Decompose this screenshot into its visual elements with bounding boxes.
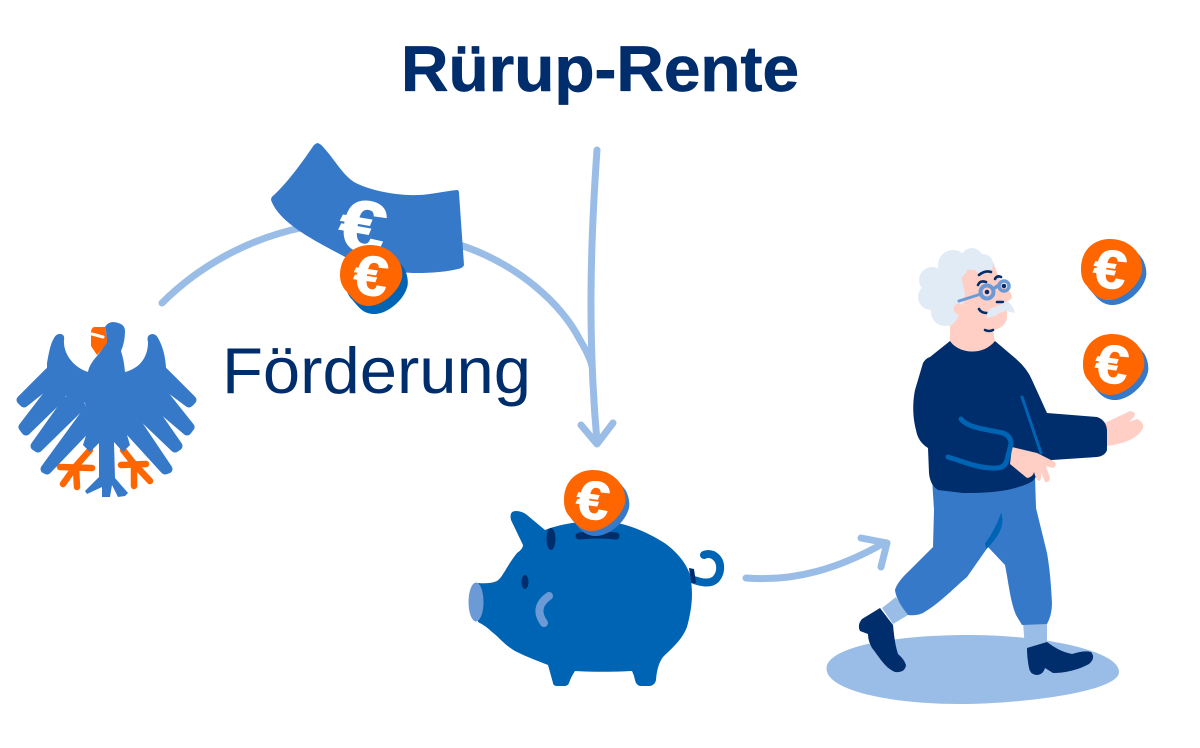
pensioner facial features bbox=[978, 271, 1005, 331]
label: Förderung: Förderung bbox=[222, 334, 531, 407]
pensioner glasses bbox=[959, 281, 1009, 301]
pig eye bbox=[522, 575, 528, 589]
pensioner shoes bbox=[859, 608, 1093, 675]
icon: upper juggled euro coin: € bbox=[1089, 238, 1130, 302]
pensioner right hand bbox=[1105, 411, 1143, 446]
arrow: piggy bank to pensioner bbox=[746, 538, 887, 579]
eagle feathers bbox=[21, 372, 192, 470]
icon: upper juggled euro coin bbox=[1081, 238, 1146, 305]
eagle beak bbox=[91, 327, 108, 355]
ground shadow bbox=[827, 635, 1119, 704]
illustration: walking pensioner bbox=[859, 248, 1143, 675]
eagle body bbox=[47, 322, 166, 497]
icon: federal eagle bbox=[21, 322, 192, 497]
pig body bbox=[478, 511, 692, 686]
icon: euro coin above piggy bank bbox=[564, 469, 629, 536]
pensioner neck and face bbox=[950, 262, 1012, 352]
pensioner moustache bbox=[987, 301, 1015, 318]
pensioner left hand bbox=[1010, 447, 1056, 482]
icon: euro coin above piggy bank: € bbox=[572, 469, 613, 533]
eagle feet bbox=[60, 450, 150, 487]
pensioner sweater bbox=[913, 341, 1107, 493]
pig cheek bbox=[539, 596, 549, 623]
banknote euro sign: € bbox=[333, 184, 392, 270]
pensioner ear bbox=[954, 304, 964, 314]
icon: euro coin on banknote: € bbox=[350, 242, 392, 309]
pig tail bbox=[694, 554, 720, 583]
pig snout bbox=[468, 582, 484, 622]
pensioner trousers bbox=[895, 476, 1052, 625]
sweater folds bbox=[948, 397, 1041, 468]
pig ear line bbox=[546, 528, 556, 550]
pensioner socks bbox=[882, 597, 1047, 648]
icon: lower juggled euro coin: € bbox=[1091, 333, 1132, 397]
arrow: subsidy curve from eagle to piggy bank bbox=[162, 227, 592, 366]
icon: piggy bank bbox=[468, 511, 720, 686]
icon: banknote with euro bbox=[271, 143, 464, 273]
trouser crease bbox=[986, 516, 1001, 547]
title: Rürup-Rente bbox=[401, 33, 799, 105]
coin slot bbox=[579, 535, 616, 536]
pensioner hair bbox=[918, 248, 993, 327]
icon: lower juggled euro coin bbox=[1083, 333, 1148, 400]
icon: euro coin on banknote bbox=[340, 242, 408, 314]
arrow: vertical contribution into piggy bank bbox=[581, 150, 613, 444]
